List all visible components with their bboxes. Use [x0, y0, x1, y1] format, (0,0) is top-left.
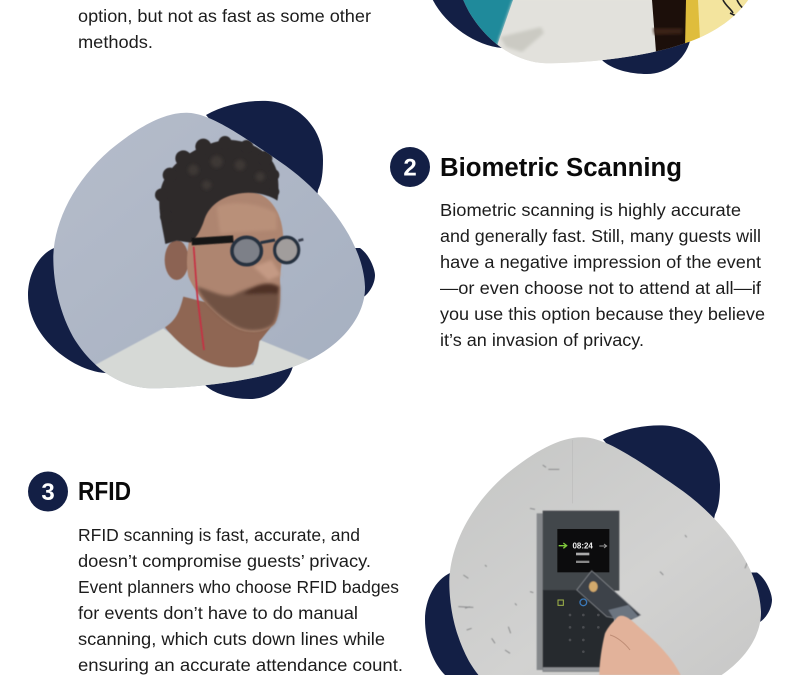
reader screen: 08:24 [572, 542, 593, 551]
access card [577, 571, 641, 623]
section 1: closing text of method one: option, but not as fast as some other [78, 6, 371, 26]
text block: RFID description: doesn’t compromise guests’ privacy. [78, 551, 371, 571]
section 3: RFID reader photo blob [425, 425, 772, 675]
text block: biometric description: —or even choose not to attend at all—if [440, 278, 761, 298]
text block: RFID description: RFID scanning is fast, accurate, and [78, 525, 360, 545]
navy blob behind photo [425, 425, 772, 675]
badge: number 2 [390, 147, 430, 187]
badge: number 2: 2 [403, 154, 417, 182]
text block: RFID description: for events don’t have to do manual [78, 603, 358, 623]
text block: biometric description [440, 200, 765, 350]
heading: Biometric Scanning: Biometric Scanning [440, 154, 682, 182]
text block: biometric description: Biometric scanning is highly accurate [440, 200, 741, 220]
reader screen [557, 529, 609, 572]
text block: biometric description: have a negative impression of the event [440, 252, 761, 272]
text block: RFID description [78, 525, 403, 675]
badge: number 3: 3 [41, 479, 55, 506]
badge: number 3 [28, 472, 68, 512]
section 1: closing text of method one: methods. [78, 32, 153, 52]
photo of hand holding card to reader [440, 430, 770, 675]
text block: biometric description: and generally fast. Still, many guests will [440, 226, 761, 246]
hand [599, 616, 681, 675]
text block: biometric description: it’s an invasion of privacy. [440, 330, 644, 350]
section 1: cropped photo blob [425, 0, 772, 74]
heading: RFID: RFID [78, 478, 131, 506]
photo of man with scanning laser [53, 112, 365, 388]
section 2: man being scanned photo blob [28, 100, 380, 400]
navy blob behind photo [28, 101, 375, 399]
text block: biometric description: you use this option because they believe [440, 304, 765, 324]
curly hair built from overlapping curls [155, 136, 279, 244]
section 1: closing text of method one [78, 6, 371, 52]
text block: RFID description: scanning, which cuts down lines while [78, 629, 385, 649]
text block: RFID description: Event planners who choose RFID badges [78, 577, 399, 597]
text block: RFID description: ensuring an accurate attendance count. [78, 655, 403, 675]
